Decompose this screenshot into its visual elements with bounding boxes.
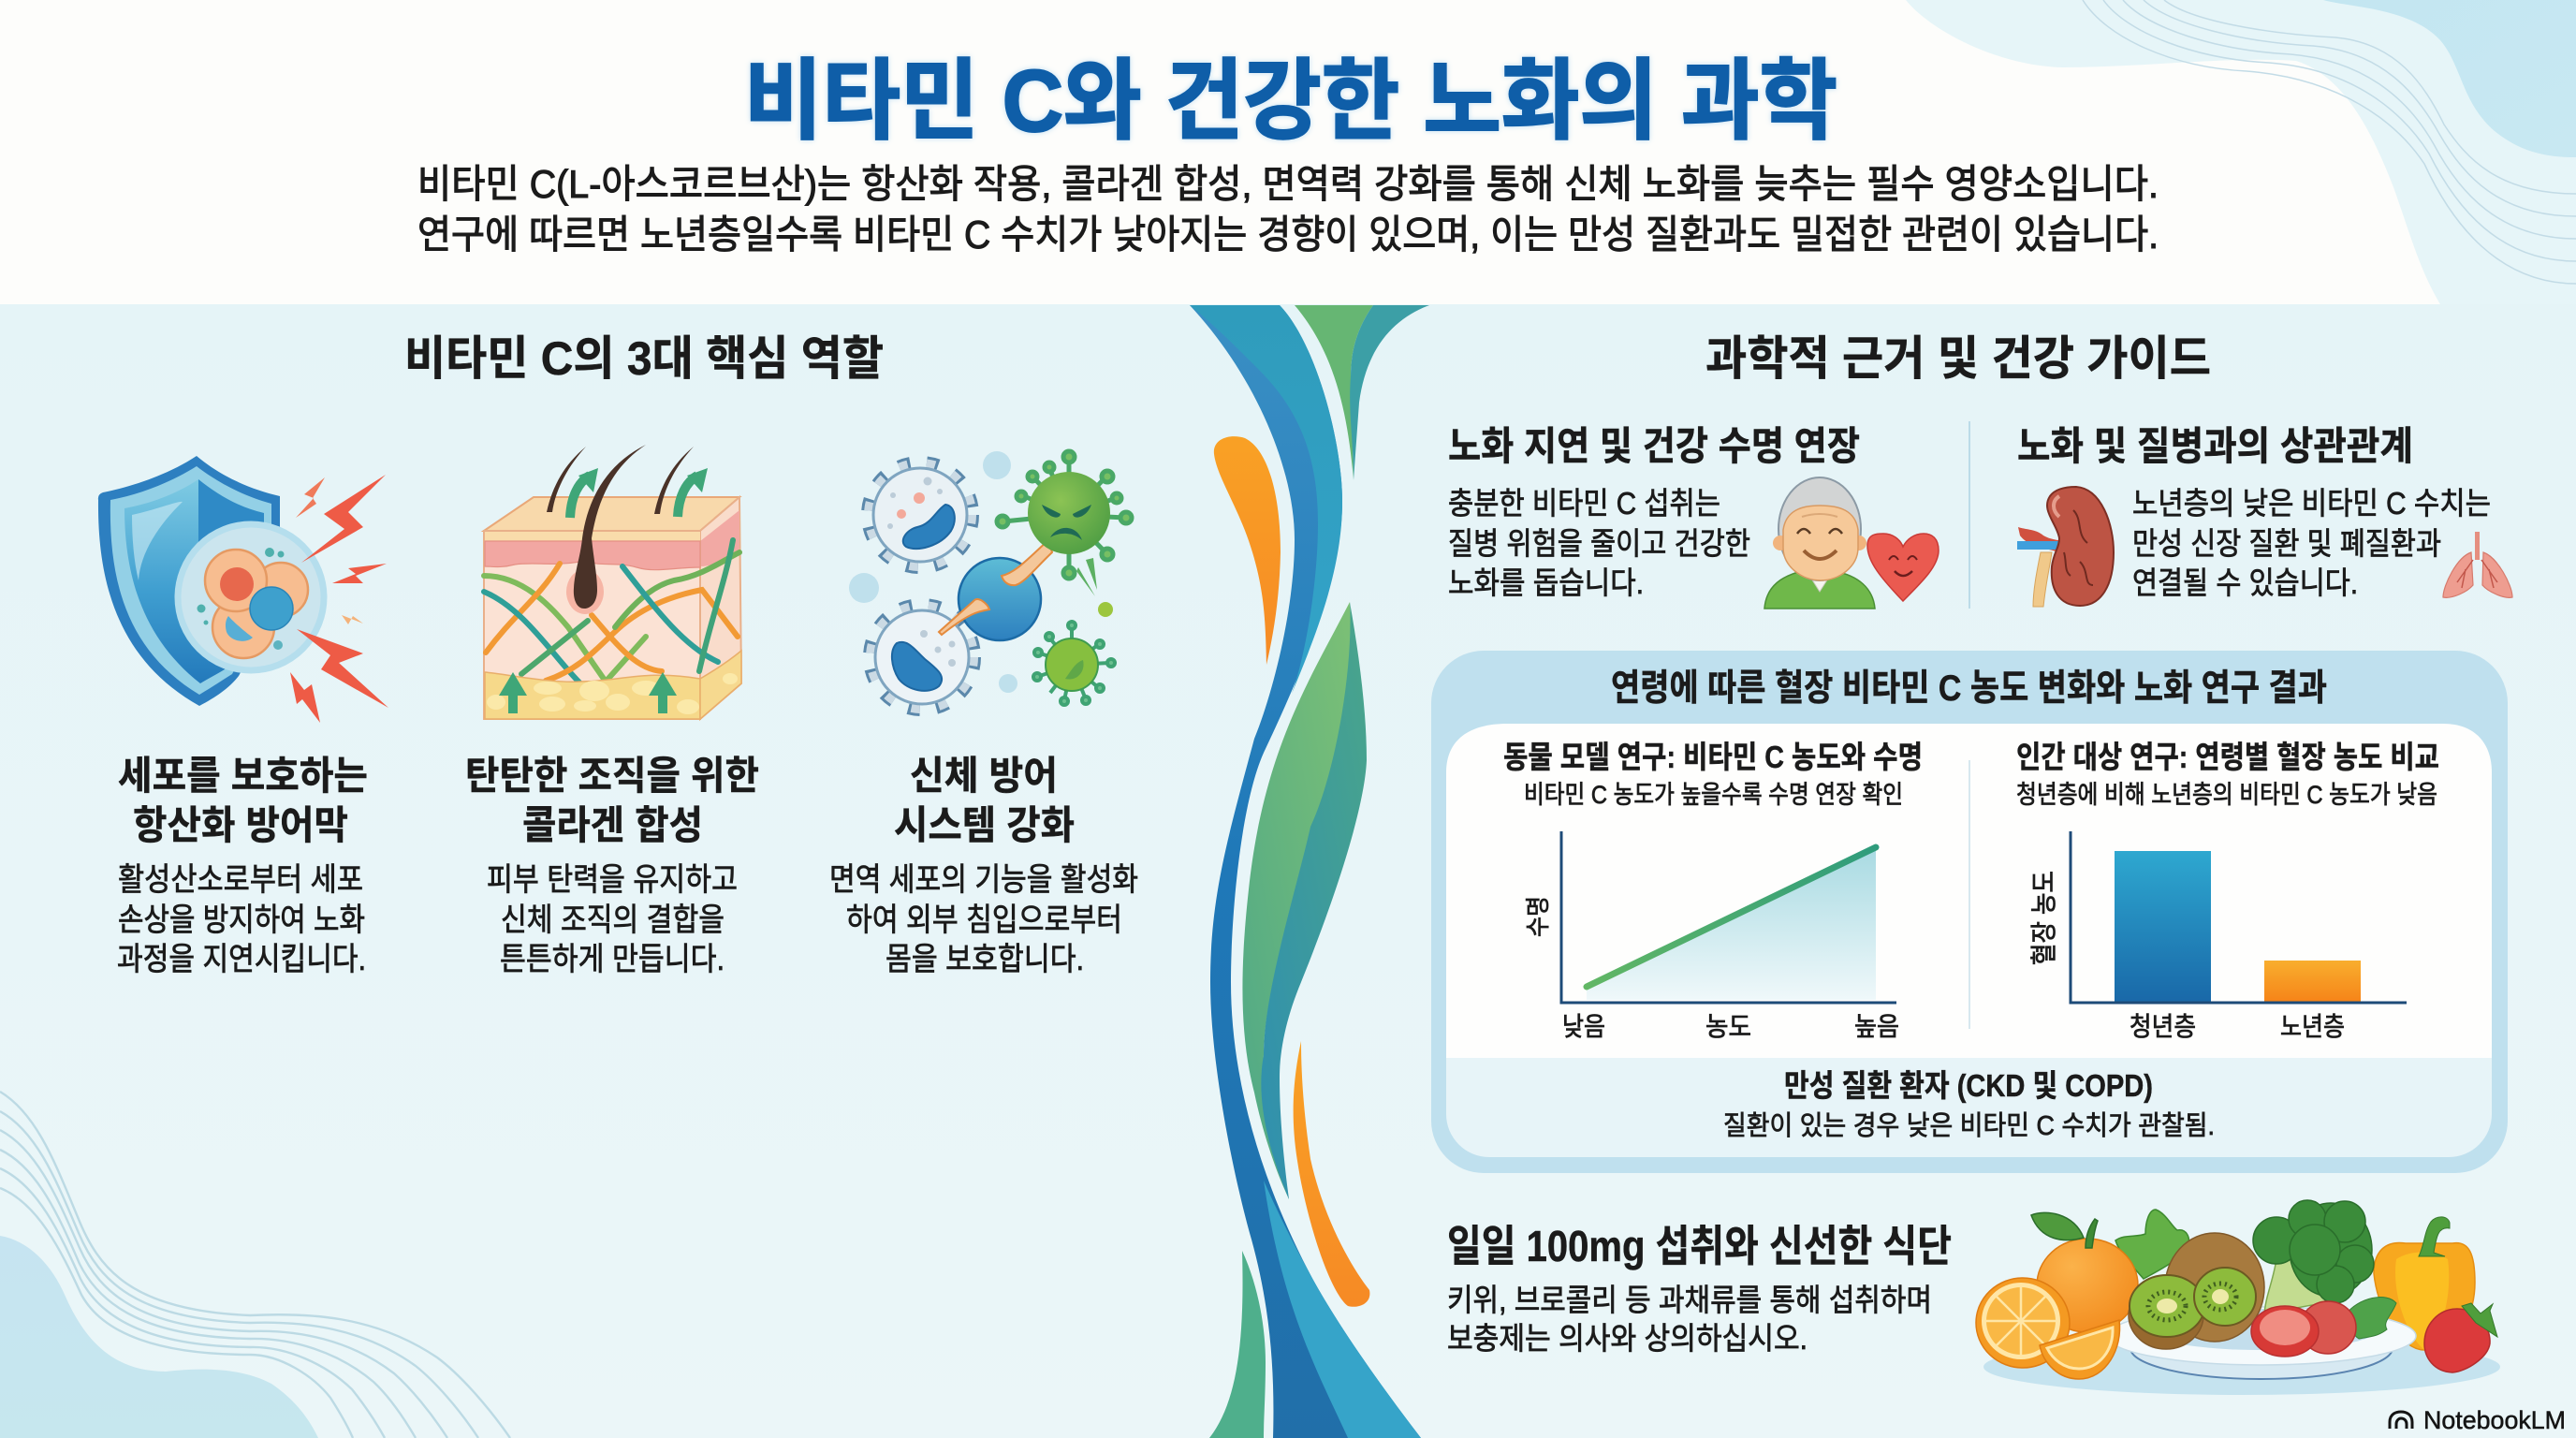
broccoli (2253, 1200, 2374, 1315)
role 2: collagen: 콜라겐 합성 (522, 803, 703, 847)
epidermis (485, 532, 700, 541)
title: 비타민 C와 건강한 노화의 과학 (744, 51, 1837, 150)
bar chart: human study: 청년층 (2130, 1012, 2196, 1041)
ribbon: upper teal layer (1190, 305, 1342, 694)
ribbon: middle leaf green (1242, 602, 1351, 1199)
line chart: animal study: 동물 모델 연구: 비타민 C 농도와 수명 (1503, 740, 1923, 774)
role 2: collagen: 탄탄한 조직을 위한 (465, 754, 759, 798)
right section heading: 과학적 근거 및 건강 가이드 (1705, 332, 2211, 385)
NotebookLM badge (2390, 1406, 2566, 1434)
shield rim (110, 466, 271, 695)
role 1: antioxidant (117, 754, 368, 977)
bar chart: human study: 인간 대상 연구: 연령별 혈장 농도 비교 (2016, 740, 2439, 774)
shield outer (98, 456, 280, 706)
trend line (1587, 847, 1876, 987)
large virus (997, 451, 1132, 579)
cell (178, 524, 324, 670)
line chart: animal study: 낮음 (1562, 1012, 1605, 1041)
block: disease correlation: 노화 및 질병과의 상관관계 (2017, 424, 2413, 468)
area under line (1587, 847, 1876, 1000)
block: disease correlation (2017, 424, 2491, 600)
block: healthy lifespan: 질병 위험을 줄이고 건강한 (1448, 526, 1750, 561)
logo mark (2390, 1412, 2412, 1429)
small hair (654, 447, 694, 514)
header wave: blue blob (2323, 0, 2576, 157)
line chart: animal study: 높음 (1854, 1012, 1899, 1041)
role 3: immunity: 하여 외부 침입으로부터 (846, 902, 1122, 938)
chronic disease note: 질환이 있는 경우 낮은 비타민 C 수치가 관찰됨. (1723, 1110, 2215, 1141)
line chart: animal study: 수명 (1524, 896, 1552, 937)
chart divider (1969, 760, 1970, 1029)
green streaks (1076, 558, 1097, 596)
ribbon: lower teal layer (1264, 1181, 1421, 1438)
sliced strawberry back (2300, 1301, 2356, 1354)
pepper (2374, 1217, 2475, 1350)
dermis (485, 541, 700, 570)
header wave: pale (1906, 0, 2576, 309)
header wave lines (2083, 0, 2576, 284)
cell organelles (197, 548, 308, 658)
chart card white area (1446, 724, 2492, 1058)
block: daily intake: 키위, 브로콜리 등 과채류를 통해 섭취하며 (1447, 1283, 1932, 1317)
whole kiwi (2165, 1233, 2264, 1342)
fat layer (485, 672, 700, 719)
central ribbon (1190, 305, 1429, 1438)
icon: smiling elder (1764, 477, 1875, 609)
bar: old (2264, 961, 2361, 1003)
ribbon: bottom leaf (1209, 1251, 1266, 1438)
line chart: animal study: 농도 (1705, 1012, 1751, 1041)
central blue cell (959, 558, 1041, 640)
collagen fibres (484, 540, 739, 683)
arrow heads (499, 468, 708, 696)
lettuce (2115, 1210, 2188, 1279)
shield inner (124, 479, 264, 683)
block: healthy lifespan: 충분한 비타민 C 섭취는 (1448, 486, 1720, 521)
role 3: immunity: 몸을 보호합니다. (886, 942, 1084, 977)
skin block front (484, 531, 700, 719)
ribbon: blue band (1190, 305, 1421, 1438)
bar chart: human study (2016, 740, 2439, 1041)
vertical divider: right blocks (1969, 421, 1970, 609)
intro text: 비타민 C(L-아스코르브산)는 항산화 작용, 콜라겐 합성, 면역력 강화를 통해 신체 노화를 늦추는 필수 영양소입니다. (417, 162, 2159, 206)
kiwi slice left (2130, 1275, 2204, 1337)
role 2: collagen: 피부 탄력을 유지하고 (487, 862, 738, 898)
pale particles (849, 451, 1017, 693)
pseudopod to white cell (939, 599, 989, 635)
icon: shield protecting cell (98, 456, 388, 723)
icon: kidney (2017, 487, 2114, 607)
plate shadow (1983, 1339, 2500, 1395)
ribbon: upper orange accent (1214, 436, 1281, 665)
block: healthy lifespan: 노화를 돕습니다. (1448, 565, 1644, 600)
chart card heading: 연령에 따른 혈장 비타민 C 농도 변화와 노화 연구 결과 (1611, 668, 2327, 709)
block: healthy lifespan: 노화 지연 및 건강 수명 연장 (1448, 424, 1860, 468)
lower panel background (0, 304, 2576, 1438)
icon: skin cross-section with collagen (484, 445, 741, 719)
ribbon: middle leaf teal (1261, 602, 1367, 1199)
bar chart: human study: 노년층 (2280, 1012, 2345, 1041)
bar chart: human study: 청년층에 비해 노년층의 비타민 C 농도가 낮음 (2016, 781, 2437, 809)
icon: immune cells attacking viruses (849, 451, 1132, 708)
side leaves (2345, 1298, 2396, 1339)
icon: plate of fruit and vegetables (1976, 1200, 2500, 1395)
role 1: antioxidant: 세포를 보호하는 (118, 754, 368, 798)
white blood cell 1 (870, 464, 971, 565)
role 3: immunity: 면역 세포의 기능을 활성화 (829, 862, 1138, 898)
white blood cell 2 (871, 607, 973, 708)
orange wedge (2040, 1320, 2120, 1379)
pseudopod to virus (1002, 540, 1052, 585)
main hair (574, 445, 646, 609)
role 3: immunity (829, 754, 1138, 977)
role 1: antioxidant: 항산화 방어막 (133, 803, 348, 847)
block: disease correlation: 만성 신장 질환 및 폐질환과 (2132, 526, 2441, 561)
small virus (1033, 622, 1115, 705)
block: disease correlation: 연결될 수 있습니다. (2132, 565, 2358, 600)
chronic disease note (1723, 1068, 2215, 1141)
chart card outer (1431, 651, 2508, 1173)
icon: smiling heart (1867, 534, 1939, 601)
role 1: antioxidant: 과정을 지연시킵니다. (117, 942, 366, 977)
role 2: collagen: 튼튼하게 만듭니다. (500, 942, 724, 977)
axes (2071, 831, 2407, 1003)
block: daily intake (1447, 1222, 1952, 1356)
growth arrows (513, 476, 697, 713)
skin block right face (700, 497, 741, 719)
orange leaf and stem (2031, 1212, 2098, 1248)
chart card lower band (1446, 936, 2492, 1157)
lower-left wave lines (0, 1092, 510, 1438)
fat cells (487, 673, 738, 714)
lower-left blob (0, 1236, 318, 1438)
role 1: antioxidant: 활성산소로부터 세포 (118, 862, 363, 898)
axes (1561, 831, 1896, 1003)
shield shaded half (198, 479, 264, 610)
bar chart: human study: 혈장 농도 (2029, 871, 2058, 965)
orange slice (1976, 1278, 2070, 1368)
bar: young (2115, 851, 2211, 1003)
hair follicle (566, 569, 604, 614)
kiwi slice right (2194, 1268, 2256, 1326)
icon: lungs (2443, 532, 2512, 597)
role 3: immunity: 시스템 강화 (894, 803, 1075, 847)
kiwi half under (2129, 1282, 2203, 1349)
whole orange (2037, 1239, 2138, 1332)
lightning bolts (290, 475, 388, 723)
skin block top (484, 497, 739, 531)
small hair (547, 447, 586, 512)
wordmark: NotebookLM (2423, 1406, 2566, 1434)
role 2: collagen: 신체 조직의 결합을 (501, 902, 724, 938)
intro text: 연구에 따르면 노년층일수록 비타민 C 수치가 낮아지는 경향이 있으며, 이는 만성 질환과도 밀접한 관련이 있습니다. (417, 213, 2159, 257)
block: daily intake: 보충제는 의사와 상의하십시오. (1447, 1321, 1808, 1356)
plate (2107, 1307, 2416, 1379)
left section heading: 비타민 C의 3대 핵심 역할 (404, 332, 884, 385)
role 3: immunity: 신체 방어 (910, 754, 1058, 798)
block: daily intake: 일일 100mg 섭취와 신선한 식단 (1447, 1222, 1952, 1270)
line chart: animal study (1503, 740, 1923, 1041)
block: disease correlation: 노년층의 낮은 비타민 C 수치는 (2132, 486, 2491, 521)
ribbon: lower orange accent (1294, 1041, 1369, 1307)
line chart: animal study: 비타민 C 농도가 높을수록 수명 연장 확인 (1524, 781, 1903, 809)
ribbon: top leaf green (1295, 305, 1373, 480)
green dot (1098, 602, 1113, 617)
chronic disease note: 만성 질환 환자 (CKD 및 COPD) (1784, 1068, 2153, 1103)
ribbon: top leaf teal (1350, 305, 1429, 480)
sliced strawberry front (2251, 1306, 2319, 1357)
block: healthy lifespan (1448, 424, 1860, 600)
role 1: antioxidant: 손상을 방지하여 노화 (118, 902, 365, 938)
whole strawberry (2424, 1303, 2497, 1372)
role 2: collagen (465, 754, 759, 977)
intro text (417, 162, 2159, 257)
shield gloss (132, 502, 183, 580)
